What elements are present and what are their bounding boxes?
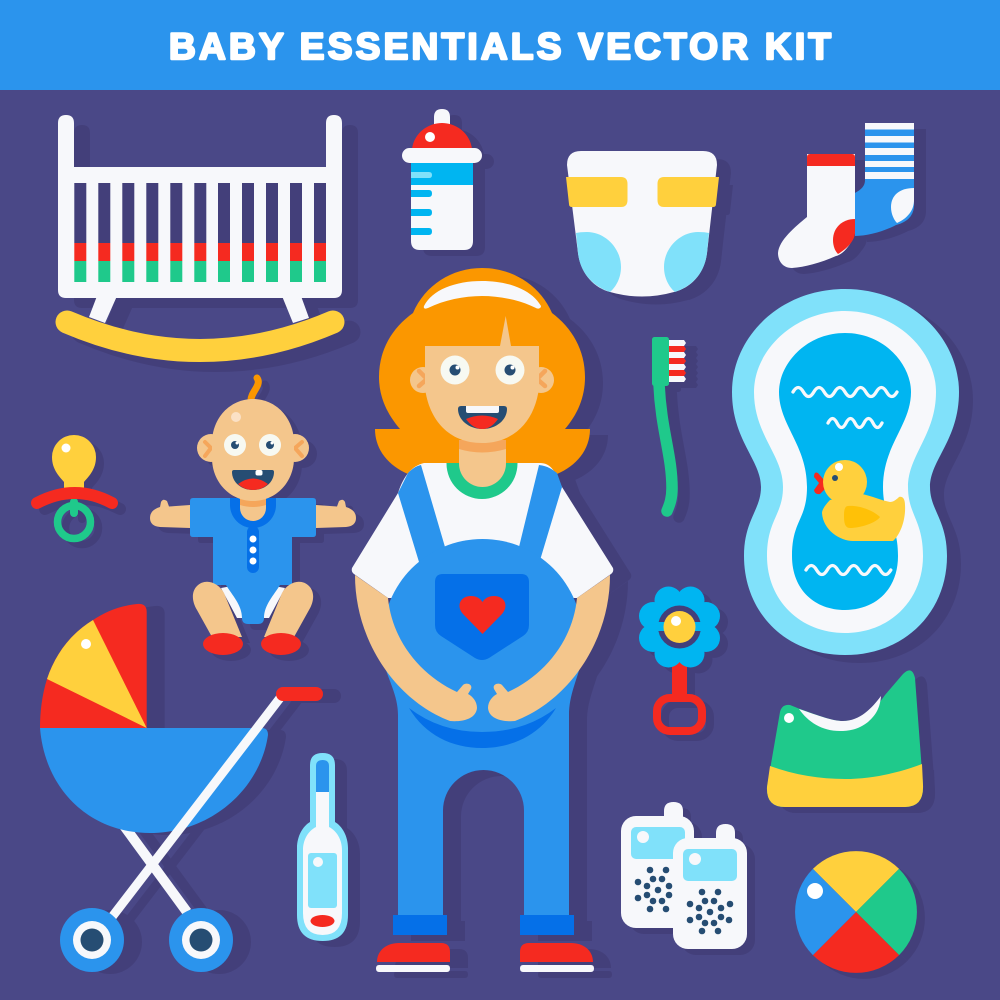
stroller canopy	[40, 604, 147, 728]
diaper body	[567, 151, 717, 296]
icon: socks	[778, 123, 914, 268]
crib legs	[89, 296, 309, 323]
rattle centre	[657, 606, 702, 648]
baby arms	[150, 500, 356, 528]
bottle ticks	[411, 172, 432, 235]
diaper leg patches	[576, 232, 709, 292]
crib rocker	[67, 322, 333, 350]
pacifier bulb	[52, 435, 96, 489]
woman ears	[410, 367, 554, 393]
woman headband	[424, 281, 541, 309]
baby bodysuit	[190, 498, 316, 624]
rattle handle	[657, 660, 702, 731]
baby hair curl	[251, 378, 258, 405]
tub water	[779, 333, 911, 610]
stroller grip	[276, 687, 323, 701]
diaper tabs	[566, 177, 719, 207]
pacifier ring	[58, 498, 90, 538]
baby mouth	[232, 470, 274, 490]
rear monitor	[621, 802, 694, 928]
icon: baby bottle	[402, 109, 482, 250]
belly shade	[409, 708, 556, 748]
woman shoes	[377, 943, 593, 962]
woman shirt	[352, 463, 613, 598]
crib frame	[58, 115, 342, 298]
header banner	[0, 0, 1000, 90]
icon: thermometer	[297, 753, 348, 941]
icon: potty	[767, 670, 923, 807]
woman mouth	[458, 406, 507, 429]
crib slots	[74, 183, 326, 282]
blue striped sock	[855, 123, 914, 236]
icon: crib	[58, 115, 342, 350]
woman trouser cuffs	[393, 915, 574, 935]
potty rim	[799, 696, 881, 731]
thermometer casing	[297, 753, 348, 941]
bottle collar	[402, 148, 482, 163]
water waves	[793, 388, 897, 574]
bottle nipple	[434, 109, 450, 126]
icon: toothbrush	[652, 337, 686, 511]
icon: pacifier	[37, 435, 112, 538]
white sock	[778, 154, 855, 268]
icon: heart	[460, 596, 505, 634]
baby shoes	[203, 633, 301, 655]
bottle cap	[412, 123, 472, 149]
woman arms	[355, 575, 610, 721]
rubber duck	[814, 460, 905, 541]
overalls straps	[398, 465, 562, 640]
stroller handle bar	[112, 698, 280, 917]
icon: bath tub	[732, 289, 959, 655]
potty base	[767, 764, 923, 807]
thermometer screen	[308, 853, 337, 908]
woman hair	[375, 268, 590, 474]
bottle body	[411, 160, 473, 250]
baby collar and placket	[230, 498, 276, 573]
ball segments	[795, 851, 917, 973]
baby legs	[193, 582, 313, 637]
overalls pocket	[435, 574, 529, 660]
stroller rear leg	[119, 819, 187, 912]
brush handle	[652, 337, 672, 511]
thermometer button	[310, 915, 334, 927]
thermometer inner	[303, 792, 342, 935]
icon: stroller	[40, 604, 323, 972]
icon: diaper	[566, 151, 719, 296]
bristles	[669, 340, 686, 382]
tub body	[732, 289, 959, 655]
pacifier shield	[37, 493, 112, 503]
potty body	[767, 670, 923, 807]
stroller wheels	[60, 908, 233, 972]
overalls belly and legs	[382, 539, 582, 915]
baby diaper	[221, 586, 285, 618]
baby figure	[150, 378, 356, 655]
woman shoe soles	[376, 965, 594, 972]
woman figure	[352, 268, 613, 972]
tub rim	[754, 311, 936, 633]
icon: beach ball	[795, 851, 917, 973]
title: BABY ESSENTIALS VECTOR KIT	[169, 26, 831, 67]
thermometer column	[316, 760, 329, 792]
icon: rattle	[639, 586, 720, 731]
woman neck	[459, 440, 506, 487]
rattle flower	[639, 586, 720, 668]
woman face	[425, 316, 539, 443]
front monitor	[673, 824, 747, 949]
icon: baby monitors	[621, 802, 747, 949]
stroller basket	[40, 728, 268, 833]
baby head	[197, 399, 309, 501]
bottle blue band	[411, 160, 473, 185]
woman collar	[446, 463, 518, 499]
